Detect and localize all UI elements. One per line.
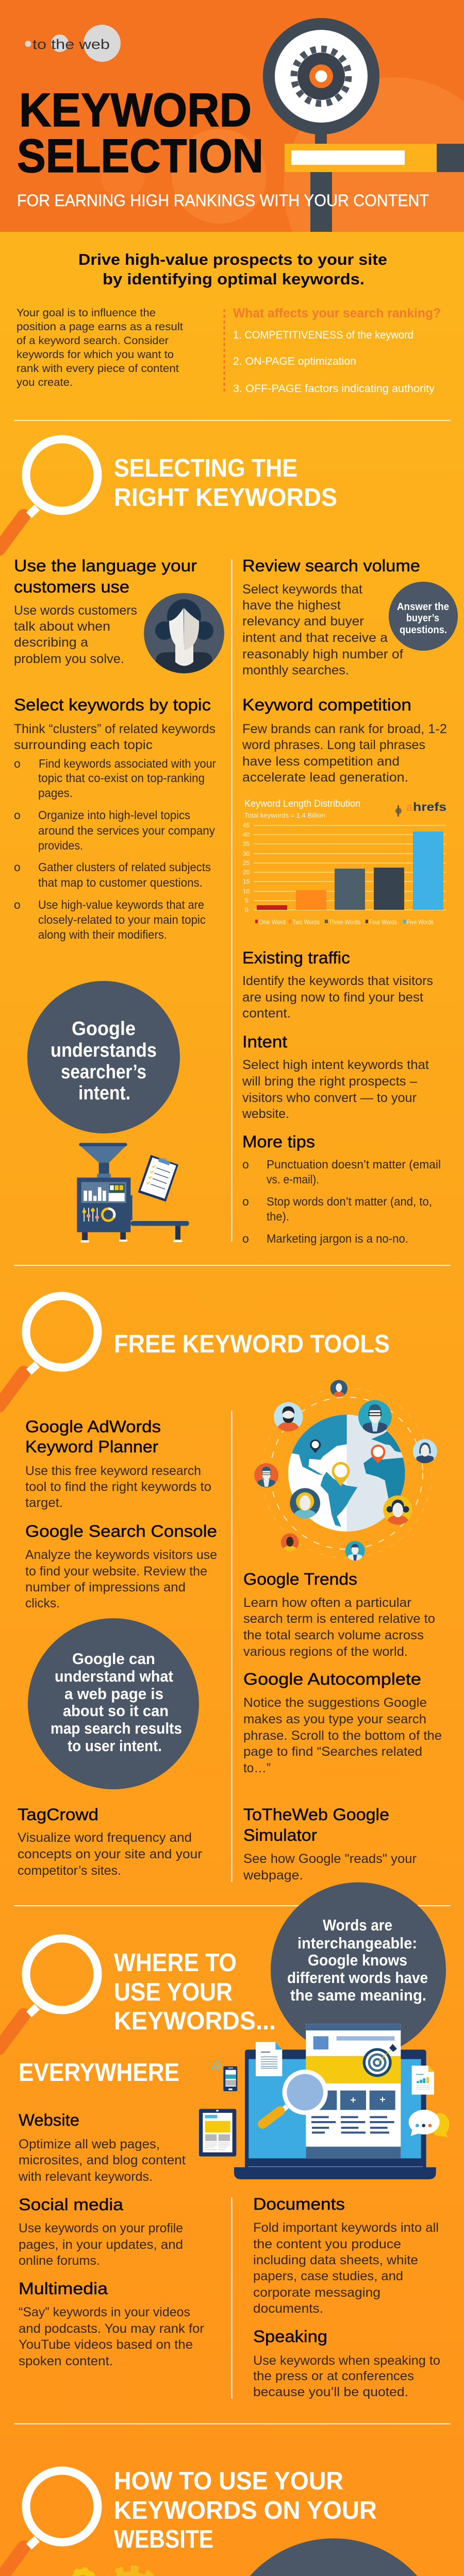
heading: where to use your keywords: WHERE TO (114, 1949, 237, 1977)
block: select keywords by topic: provides. (38, 839, 83, 852)
callout: google can understand what a web page is about: about so it can (63, 1702, 169, 1720)
block: review search volume: relevancy and buyer (242, 614, 364, 629)
block: more tips: o (242, 1195, 249, 1208)
block: documents: papers, case studies, and (253, 2269, 403, 2283)
block: documents: documents. (253, 2301, 323, 2316)
block: social media: Social media (19, 2195, 123, 2214)
bar chart: keyword length distribution: 25 (243, 859, 250, 867)
block: tagcrowd: concepts on your site and your (18, 1847, 202, 1861)
block: totheweb google simulator (243, 1805, 417, 1883)
block: select keywords by topic: o (14, 898, 21, 911)
block: google trends: Google Trends (243, 1570, 357, 1588)
block: google autocomplete: phrase. Scroll to the bottom of the (243, 1728, 442, 1743)
icon: globe with people and map pins (254, 1380, 437, 1561)
block: keyword competition: have less competition and (242, 754, 400, 769)
bar chart: keyword length distribution: 0 (245, 906, 248, 913)
block: google autocomplete: page to find “Searches related (243, 1744, 422, 1759)
icon: magnifier section 3 (0, 1938, 98, 2048)
callout: google understands searcher's intent: understands (51, 1040, 157, 1061)
logo: to the web (25, 25, 121, 62)
block: intent: Intent (242, 1032, 287, 1051)
block: select keywords by topic: o (14, 757, 21, 770)
block: google search console: to find your website. Review the (25, 1564, 207, 1579)
block: speaking: Speaking (253, 2327, 327, 2346)
bar chart: keyword length distribution: 45 (243, 822, 250, 829)
icon: laptop with web page, magnifier and devices (199, 2024, 450, 2179)
intro headline: Drive high-value prospects to your site (78, 250, 387, 268)
block: google trends: search term is entered relative to (243, 1612, 435, 1626)
logo: ahrefs: a (406, 800, 412, 814)
block: existing traffic (242, 948, 433, 1021)
block: google search console: Analyze the keywords visitors use (25, 1548, 217, 1562)
block: tagcrowd (18, 1805, 202, 1878)
block: select keywords by topic: topic that co-exist on top-ranking (38, 771, 205, 785)
callout: answer the buyer's questions: buyer’s (406, 613, 439, 624)
block: tagcrowd: competitor’s sites. (18, 1863, 121, 1878)
block: select keywords by topic: around the services your company (38, 824, 215, 837)
block: select keywords by topic (14, 696, 216, 941)
block: website: microsites, and blog content (19, 2153, 186, 2167)
block: select keywords by topic: along with their modifiers. (38, 928, 167, 941)
block: documents: Documents (253, 2195, 345, 2213)
block: speaking (253, 2327, 440, 2399)
callout: words are interchangeable: interchangeable: (297, 1934, 417, 1952)
heading: selecting the right keywords (114, 454, 337, 512)
block: google autocomplete: Google Autocomplete (243, 1670, 421, 1688)
bar chart: keyword length distribution: 35 (243, 840, 250, 848)
block: use the language your customers use: problem you solve. (14, 652, 124, 666)
block: google autocomplete: to…” (243, 1761, 271, 1775)
block: google trends: the total search volume across (243, 1628, 424, 1642)
block: select keywords by topic: Find keywords associated with your (39, 757, 216, 770)
bar chart: keyword length distribution: Total keywords = 1.4 Billion (244, 811, 325, 819)
block: speaking: because you’ll be quoted. (253, 2385, 408, 2399)
block: keyword competition: Keyword competition (242, 696, 411, 714)
block: more tips: Marketing jargon is a no-no. (267, 1232, 408, 1245)
block: tagcrowd: TagCrowd (18, 1805, 98, 1824)
block: use the language your customers use: customers use (14, 578, 129, 596)
bar chart: keyword length distribution: Three Words (329, 918, 360, 926)
heading: everywhere: EVERYWHERE (19, 2059, 179, 2087)
block: select keywords by topic: that map to customer questions. (38, 876, 203, 889)
bar chart: keyword length distribution: One Word (259, 918, 286, 926)
block: google autocomplete: makes as you type your search (243, 1712, 426, 1726)
callout: google understands searcher's intent: searcher’s (61, 1061, 146, 1083)
block: review search volume: have the highest (242, 598, 341, 613)
block: google adwords keyword planner: Google AdWords (25, 1417, 161, 1436)
bar chart: keyword length distribution: Two Words (292, 918, 320, 926)
callout: google understands searcher's intent (27, 981, 180, 1133)
block: review search volume: intent and that receive a (242, 631, 388, 645)
callout: words are interchangeable: the same meaning. (290, 1986, 426, 2004)
block: totheweb google simulator: See how Google "reads" your (243, 1852, 417, 1866)
block: google search console (25, 1522, 217, 1611)
block: select keywords by topic: Select keywords by topic (14, 696, 211, 714)
block: documents: including data sheets, white (253, 2253, 418, 2267)
heading: free keyword tools: FREE KEYWORD TOOLS (114, 1330, 390, 1358)
header banner (0, 0, 464, 232)
block: website: with relevant keywords. (18, 2170, 153, 2184)
callout: words are interchangeable (271, 1883, 446, 2058)
intro paragraph: rank with every piece of content (16, 363, 179, 375)
block: more tips: More tips (242, 1132, 315, 1151)
block: existing traffic: Identify the keywords that visitors (242, 974, 433, 988)
heading: where to use your keywords: USE YOUR (114, 1978, 233, 2006)
block: use the language your customers use: talk about when (14, 619, 110, 634)
block: google adwords keyword planner: Use this free keyword research (25, 1464, 201, 1478)
block: totheweb google simulator: ToTheWeb Google (243, 1805, 389, 1824)
block: existing traffic: are using now to find your best (242, 990, 423, 1005)
title: KEYWORD (19, 84, 252, 137)
bar chart: keyword length distribution: 30 (243, 850, 250, 857)
block: google trends (243, 1570, 435, 1659)
block: social media: online forums. (19, 2253, 100, 2268)
heading: selecting the right keywords: SELECTING THE (114, 454, 297, 482)
block: google search console: clicks. (25, 1596, 60, 1611)
icon: keyword processing machine with clipboard (77, 1143, 189, 1243)
block: documents: the content you produce (253, 2237, 401, 2251)
block: more tips: the). (267, 1210, 289, 1223)
block: multimedia: Multimedia (19, 2279, 108, 2298)
block: more tips: vs. e-mail). (267, 1173, 319, 1186)
block: select keywords by topic: surrounding each topic (14, 738, 153, 752)
block: google trends: various regions of the world. (243, 1645, 408, 1659)
block: documents: Fold important keywords into all (253, 2221, 439, 2235)
icon: magnifier section 4 (0, 2471, 98, 2576)
callout: your goal is to improve engagement (222, 2538, 445, 2576)
heading: how to use your keywords on your website (114, 2467, 377, 2553)
block: speaking: Use keywords when speaking to (253, 2353, 440, 2368)
block: totheweb google simulator: webpage. (243, 1868, 303, 1883)
bar chart: keyword length distribution (243, 799, 446, 926)
block: google autocomplete: Notice the suggestions Google (243, 1696, 427, 1710)
callout: answer the buyer's questions: Answer the (397, 601, 449, 613)
block: speaking: the press or at conferences (253, 2369, 414, 2383)
bar chart: keyword length distribution: 20 (243, 869, 250, 876)
block: select keywords by topic: o (14, 860, 21, 874)
intro paragraph: keywords for which you want to (16, 349, 174, 361)
block: google search console: number of impressions and (25, 1580, 186, 1595)
block: social media: pages, in your updates, and (19, 2238, 183, 2252)
block: more tips: o (242, 1158, 249, 1171)
block: keyword competition: Few brands can rank for broad, 1-2 (242, 722, 447, 736)
intro paragraph: you create. (16, 377, 73, 388)
icon: customer avatar (144, 593, 224, 675)
logo: to the web: to the web (32, 37, 110, 52)
panel: what affects your search ranking (224, 306, 441, 395)
callout: google can understand what a web page is about: map search results (51, 1719, 182, 1737)
block: google autocomplete (243, 1670, 442, 1775)
callout: google can understand what a web page is about: to user intent. (68, 1737, 162, 1755)
block: google trends: Learn how often a particular (243, 1596, 411, 1610)
block: review search volume: Review search volume (242, 556, 420, 575)
panel: what affects your search ranking: 1. COMPETITIVENESS of the keyword (233, 329, 413, 341)
intro paragraph: position a page earns as a result (16, 321, 183, 333)
block: review search volume: monthly searches. (242, 663, 349, 677)
callout: google understands searcher's intent: intent. (78, 1082, 130, 1104)
block: review search volume: Select keywords that (242, 582, 362, 597)
bar chart: keyword length distribution: Five Words (407, 918, 434, 926)
block: multimedia: YouTube videos based on the (19, 2337, 193, 2352)
callout: answer the buyer's questions: questions. (400, 624, 447, 636)
block: tagcrowd: Visualize word frequency and (18, 1831, 192, 1845)
block: select keywords by topic: Think “clusters” of related keywords (14, 722, 216, 736)
bar chart: keyword length distribution: 40 (243, 831, 250, 838)
avatars (254, 1383, 437, 1561)
block: google search console: Google Search Console (25, 1522, 217, 1540)
intro paragraph: of a keyword search. Consider (16, 335, 169, 347)
block: totheweb google simulator: Simulator (243, 1826, 317, 1844)
intro paragraph: Your goal is to influence the (16, 307, 156, 319)
block: keyword competition: word phrases. Long tail phrases (242, 738, 425, 752)
bar chart: keyword length distribution: 5 (245, 897, 248, 904)
map pins (310, 1439, 385, 1486)
bar chart: keyword length distribution: Keyword Length Distribution (244, 799, 360, 809)
block: more tips (242, 1132, 441, 1245)
callout: words are interchangeable: Words are (323, 1916, 392, 1934)
intro paragraph (16, 307, 183, 388)
block: use the language your customers use: Use the language your (14, 556, 197, 575)
block: multimedia (19, 2279, 204, 2368)
icon: magnifier section 2 (0, 1296, 98, 1406)
bar chart: keyword length distribution: Four Words (369, 918, 397, 926)
block: more tips: o (242, 1232, 249, 1245)
block: google adwords keyword planner: target. (25, 1496, 63, 1510)
icon: gears (52, 2569, 197, 2576)
block: select keywords by topic: Gather clusters of related subjects (38, 860, 211, 874)
block: intent: website. (242, 1107, 289, 1121)
block: documents (253, 2195, 439, 2316)
block: multimedia: “Say” keywords in your videos (19, 2305, 190, 2319)
block: existing traffic: content. (242, 1006, 291, 1021)
icon: magnifier section 1 (0, 439, 98, 549)
subtitle: FOR EARNING HIGH RANKINGS WITH YOUR CONTENT (17, 191, 429, 210)
block: google adwords keyword planner (25, 1417, 211, 1510)
bar chart: keyword length distribution: 10 (243, 888, 250, 895)
panel: what affects your search ranking: What affects your search ranking? (233, 306, 441, 320)
callout: words are interchangeable: Google knows (308, 1951, 407, 1969)
callout: google can understand what a web page is about: a web page is (64, 1685, 163, 1703)
block: select keywords by topic: Organize into high-level topics (38, 808, 190, 822)
block: intent (242, 1032, 429, 1121)
heading: how to use your keywords on your website: HOW TO USE YOUR (114, 2467, 343, 2495)
intro headline: by identifying optimal keywords. (103, 270, 364, 288)
block: google adwords keyword planner: Keyword Planner (25, 1437, 158, 1456)
heading: how to use your keywords on your website: KEYWORDS ON YOUR (114, 2497, 377, 2524)
intro headline (78, 250, 387, 288)
bar chart: keyword length distribution: 15 (243, 878, 250, 885)
block: select keywords by topic: o (14, 808, 21, 822)
block: social media: Use keywords on your profile (19, 2221, 183, 2235)
block: website (18, 2111, 186, 2184)
heading: how to use your keywords on your website: WEBSITE (114, 2526, 213, 2553)
block: website: Website (19, 2111, 79, 2129)
callout: google understands searcher's intent: Google (72, 1018, 136, 1040)
block: documents: corporate messaging (253, 2285, 380, 2300)
logo: ahrefs: hrefs (413, 800, 446, 814)
heading: selecting the right keywords: RIGHT KEYWORDS (114, 484, 337, 512)
callout: answer the buyer's questions (389, 582, 458, 651)
block: use the language your customers use (14, 556, 197, 666)
block: select keywords by topic: closely-related to your main topic (38, 913, 206, 926)
block: website: Optimize all web pages, (19, 2137, 160, 2151)
block: intent: Select high intent keywords that (242, 1058, 429, 1072)
block: intent: visitors who convert — to your (242, 1091, 417, 1105)
heading: where to use your keywords (114, 1949, 276, 2035)
block: review search volume: reasonably high number of (242, 647, 403, 662)
heading: where to use your keywords: KEYWORDS... (114, 2007, 276, 2035)
title (17, 84, 263, 182)
block: google adwords keyword planner: tool to find the right keywords to (25, 1480, 211, 1494)
block: keyword competition (242, 696, 447, 785)
icon: magnifying glass with gear over search bar (263, 18, 464, 232)
block: social media (19, 2195, 183, 2268)
callout: google can understand what a web page is about: understand what (55, 1667, 173, 1685)
panel: what affects your search ranking: 2. ON-PAGE optimization (233, 355, 356, 367)
callout: words are interchangeable: different words have (287, 1969, 428, 1987)
block: select keywords by topic: Use high-value keywords that are (38, 898, 204, 911)
logo: ahrefs (395, 800, 446, 817)
block: more tips: Stop words don’t matter (and, to, (267, 1195, 432, 1208)
callout: google can understand what a web page is about (28, 1618, 199, 1789)
block: use the language your customers use: Use words customers (14, 603, 137, 618)
block: keyword competition: accelerate lead generation. (242, 770, 408, 785)
block: select keywords by topic: pages. (38, 786, 73, 800)
block: review search volume (242, 556, 420, 677)
callout: google can understand what a web page is about: Google can (72, 1650, 155, 1668)
block: intent: will bring the right prospects – (242, 1074, 417, 1089)
block: use the language your customers use: describing a (14, 635, 88, 650)
block: multimedia: spoken content. (19, 2354, 113, 2368)
title: SELECTION (17, 130, 263, 182)
block: existing traffic: Existing traffic (242, 948, 350, 967)
panel: what affects your search ranking: 3. OFF-PAGE factors indicating authority (233, 383, 435, 395)
block: more tips: Punctuation doesn’t matter (email (267, 1158, 441, 1171)
block: multimedia: and podcasts. You may rank for (19, 2321, 204, 2336)
